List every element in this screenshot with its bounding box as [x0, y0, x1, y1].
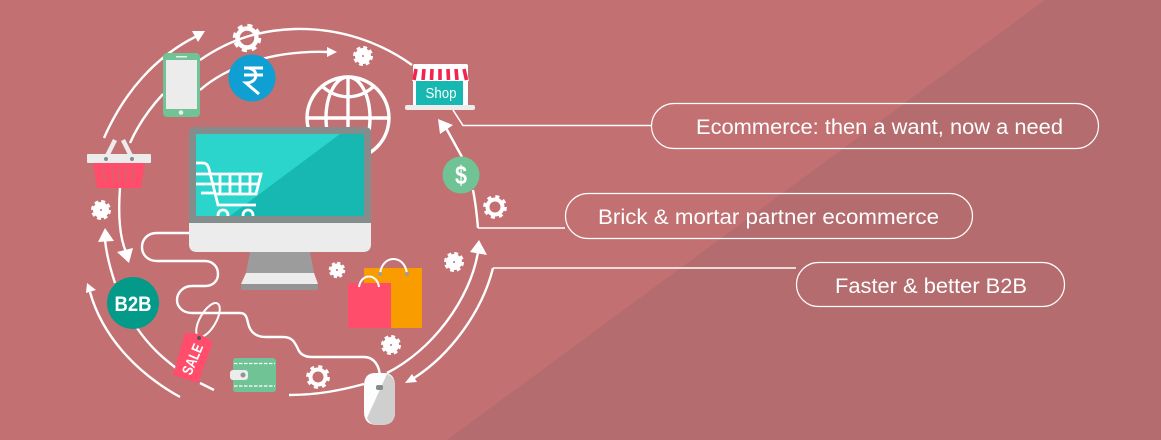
- icon: gear outline bottom: [308, 366, 328, 388]
- label: brick and mortar: [566, 194, 972, 238]
- label: ecommerce: Ecommerce: then a want, now a need: [696, 116, 1063, 139]
- icon: rupee coin: [228, 54, 276, 102]
- icon: gear top: [234, 26, 260, 50]
- icon: gear below bags: [382, 336, 400, 354]
- icon: shopping cart: [196, 163, 261, 220]
- icon: mouse: [364, 373, 395, 425]
- monitor body: [189, 127, 371, 223]
- icon: gear right of bags: [446, 254, 462, 270]
- background diagonal panel: [447, 0, 1161, 440]
- icon: phone: [163, 53, 200, 117]
- label: brick and mortar: Brick & mortar partner ecommerce: [598, 206, 939, 229]
- icon: shopping bags: [348, 259, 422, 328]
- monitor stand: [246, 252, 314, 273]
- label: B2B: Faster & better B2B: [835, 275, 1027, 298]
- globe icon: [307, 77, 389, 159]
- icon: gear left: [92, 202, 110, 218]
- icon: sale tag: SALE: [179, 341, 207, 378]
- icon: basket: [87, 140, 151, 188]
- icon: shop: [405, 64, 475, 110]
- icon: monitor: [189, 127, 371, 290]
- icon: dollar coin: $: [455, 160, 467, 190]
- icon: sale tag: [173, 300, 224, 383]
- icon: shop: Shop: [426, 85, 456, 102]
- flow arcs and arrows: [90, 29, 493, 397]
- icon: gear near monitor: [330, 263, 344, 277]
- icon: B2B badge: [107, 277, 159, 329]
- icon: dollar coin: [442, 156, 480, 194]
- icon: gear outline by dollar: [484, 196, 506, 218]
- cable from monitor to mouse: [142, 233, 380, 378]
- icon: gear near globe: [354, 48, 372, 64]
- label: ecommerce: [652, 104, 1098, 148]
- connector lines to labels: [453, 110, 796, 268]
- label: B2B: [796, 262, 1064, 306]
- arrow heads: [86, 31, 487, 383]
- icon: B2B badge: B2B: [114, 293, 152, 316]
- icon: wallet: [230, 358, 276, 392]
